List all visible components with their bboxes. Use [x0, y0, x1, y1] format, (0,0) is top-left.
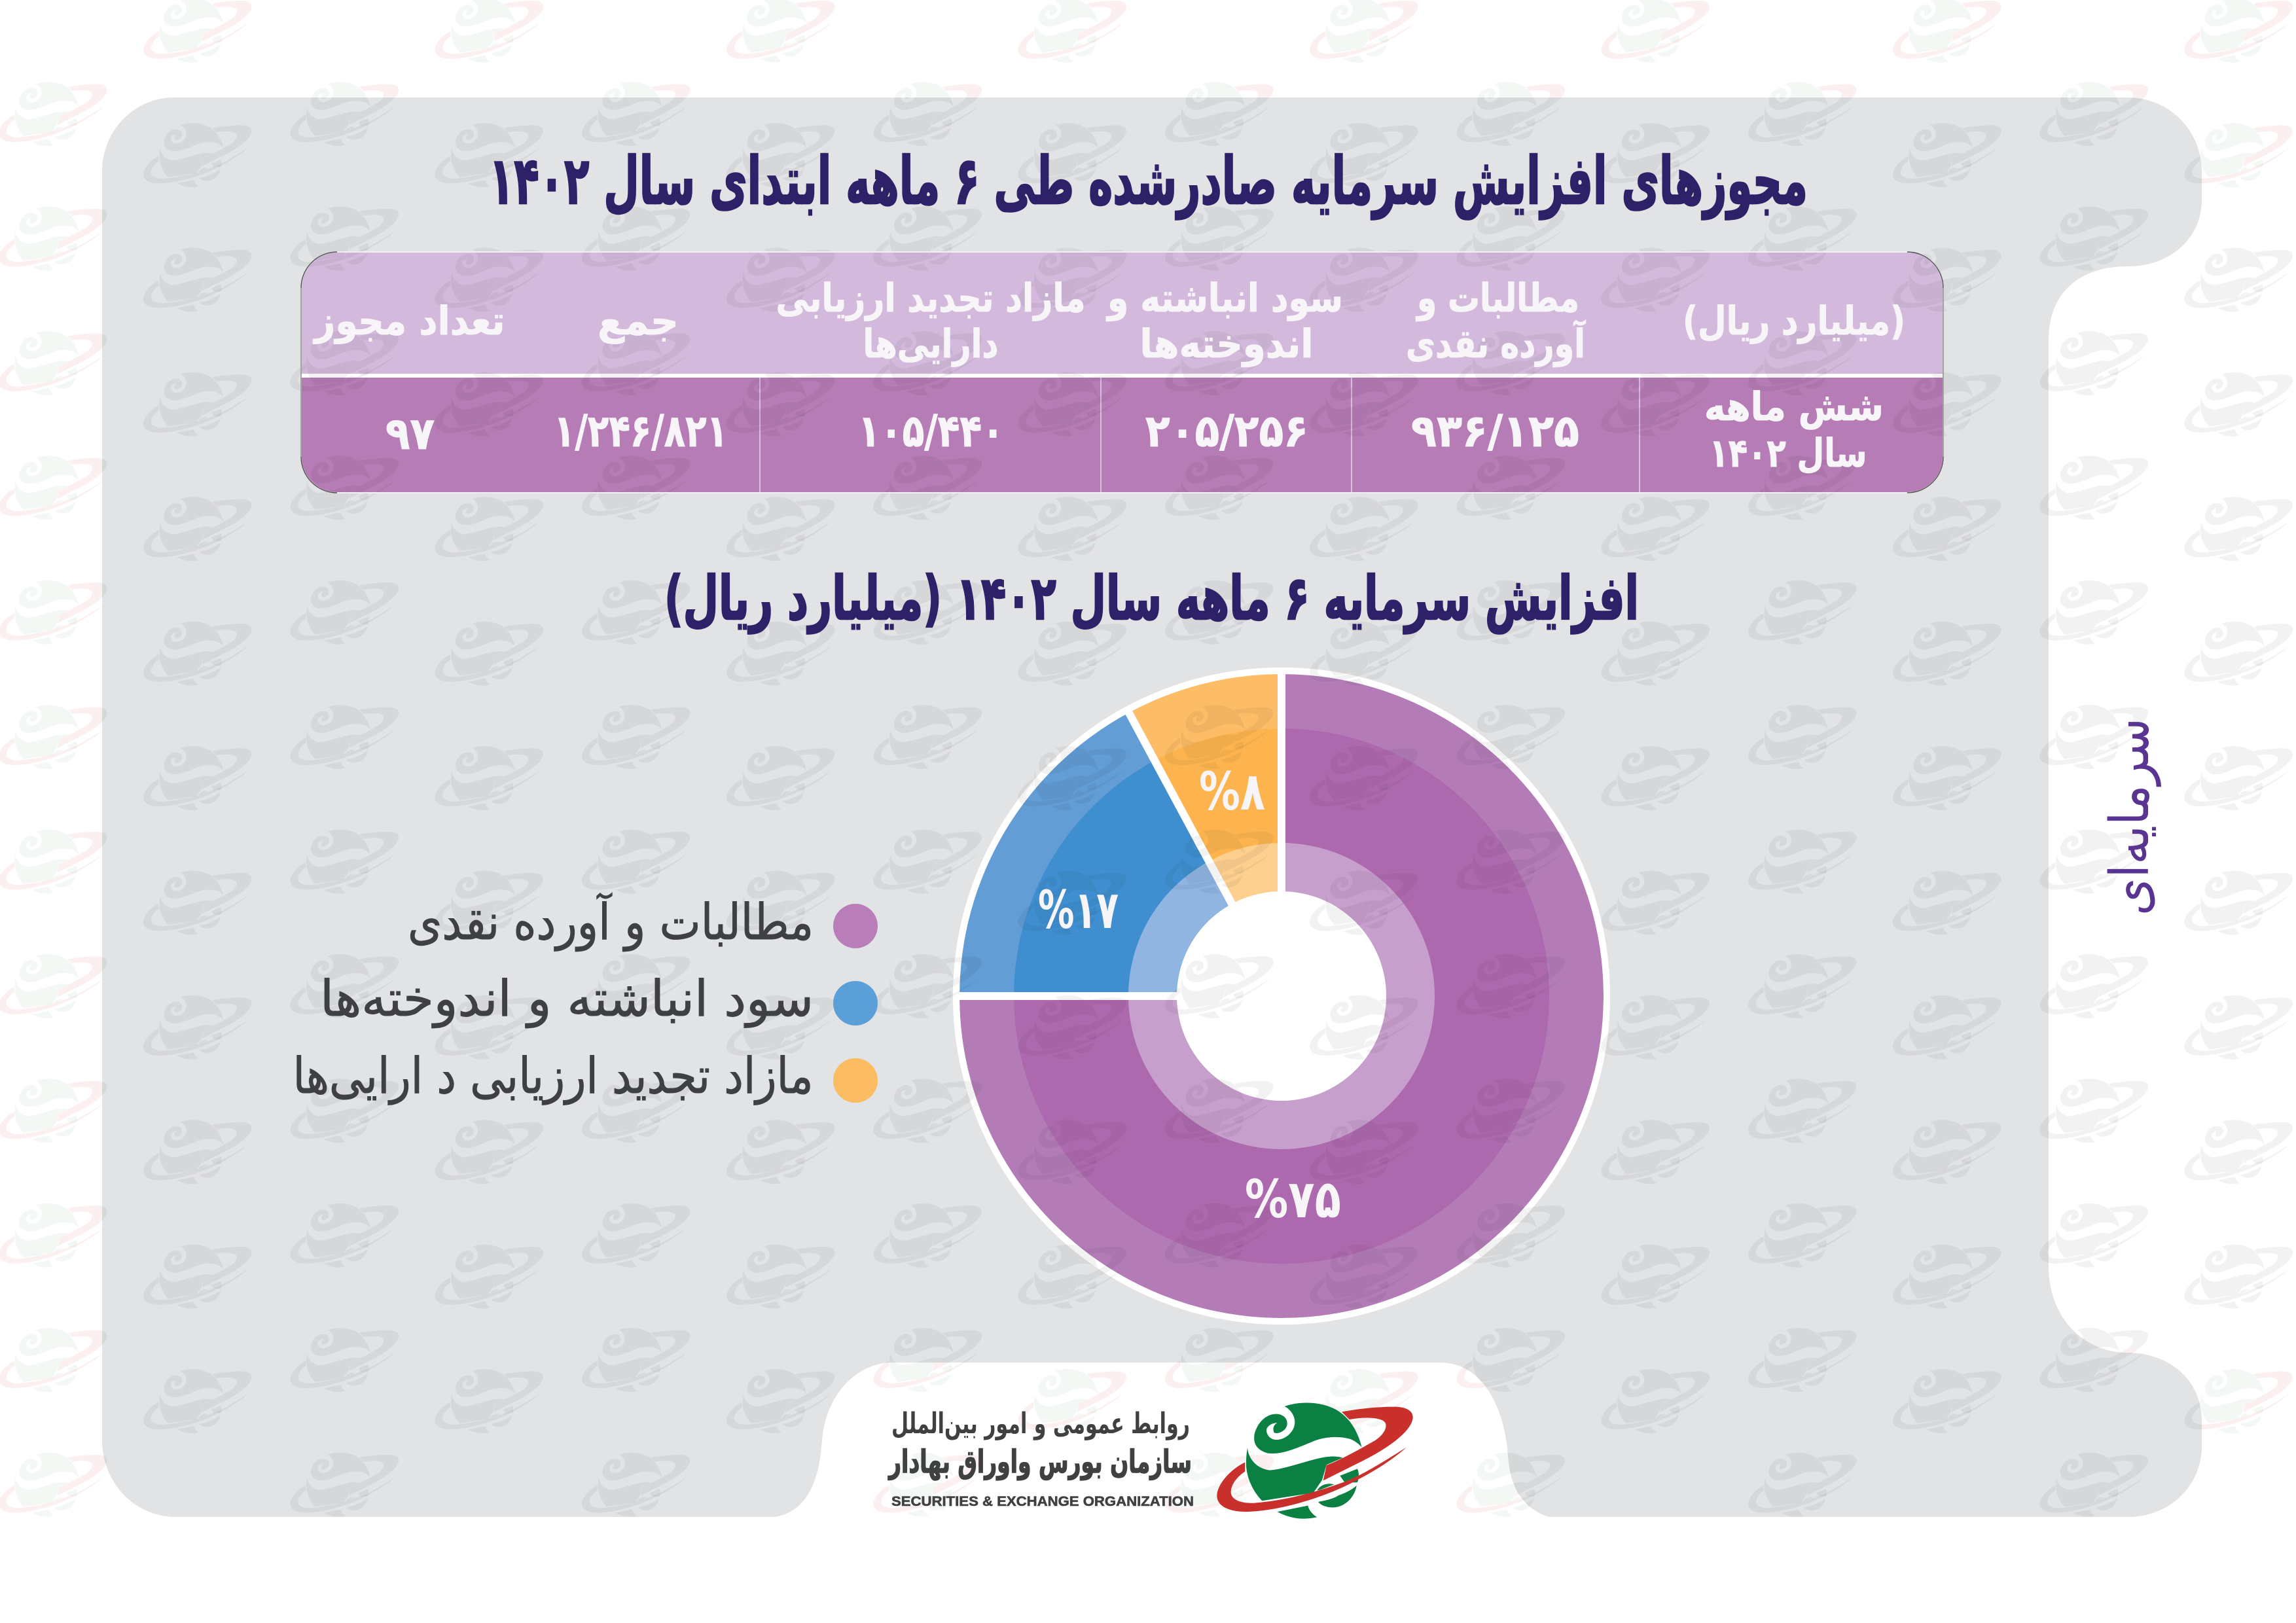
legend item: retained earnings: سود انباشته و اندوخته‌ها	[320, 969, 814, 1028]
table: capital increase permits	[301, 252, 1943, 493]
table header row: مطالبات و	[1416, 276, 1579, 321]
icon: organization logo	[1217, 1403, 1413, 1519]
table header row: دارایی‌ها	[863, 321, 999, 367]
table header row: سود انباشته و	[1105, 276, 1343, 321]
footer: organization name	[888, 1407, 1194, 1509]
table header row: آورده نقدی	[1406, 319, 1586, 367]
title: مجوزهای افزایش سرمایه صادرشده طی ۶ ماهه ابتدای سال ۱۴۰۲	[489, 143, 1808, 220]
footer: organization name: سازمان بورس واوراق بهادار	[888, 1444, 1192, 1480]
table header row: (میلیارد ریال)	[1683, 298, 1905, 344]
table data row: شش ماهه	[1704, 384, 1884, 430]
table data row: ۱۰۵/۴۴۰	[858, 406, 1004, 457]
table header row: اندوخته‌ها	[1140, 321, 1313, 367]
sector: receivables and cash 75%	[960, 674, 1604, 1318]
legend item: receivables and cash: مطالبات و آورده نقدی	[408, 893, 814, 952]
table header row: مازاد تجدید ارزیابی	[776, 276, 1085, 321]
footer: organization name: روابط عمومی و امور بین‌الملل	[891, 1407, 1190, 1440]
table data row: ۹۷	[386, 408, 435, 460]
table data row	[386, 384, 1884, 476]
table header row	[313, 276, 1905, 367]
percent labels: %۱۷	[1038, 880, 1119, 940]
table data row: سال ۱۴۰۲	[1710, 431, 1867, 476]
legend	[293, 893, 878, 1105]
footer: organization name: SECURITIES & EXCHANGE ORGANIZATION	[891, 1494, 1194, 1509]
percent labels: %۷۵	[1245, 1169, 1341, 1230]
table data row: ۹۳۶/۱۲۵	[1411, 406, 1579, 457]
legend item: asset revaluation: مازاد تجدید ارزیابی د ارایی‌ها	[293, 1046, 813, 1105]
sector: retained earnings 17%	[960, 713, 1282, 996]
vertical category label: سرمایه‌ای	[2099, 718, 2161, 916]
donut chart	[953, 668, 1610, 1325]
table data row: ۲۰۵/۲۵۶	[1145, 406, 1308, 457]
table header row: جمع	[598, 298, 679, 344]
percent labels: %۸	[1199, 761, 1265, 822]
table data row: ۱/۲۴۶/۸۲۱	[554, 406, 728, 457]
percent labels	[1038, 761, 1341, 1230]
chart heading: افزایش سرمایه ۶ ماهه سال ۱۴۰۲ (میلیارد ریال)	[664, 563, 1639, 634]
sector: asset revaluation 8%	[1129, 674, 1282, 996]
table header row: تعداد مجوز	[313, 298, 505, 344]
